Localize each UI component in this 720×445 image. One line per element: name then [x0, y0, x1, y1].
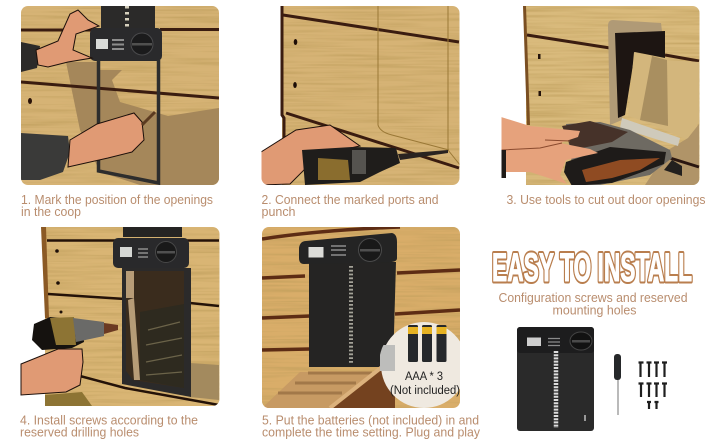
- hand: [261, 125, 360, 185]
- door frame outline: [98, 60, 158, 183]
- lower sleeve: [21, 133, 70, 180]
- control screen: [96, 39, 108, 49]
- drill handle lower: [45, 392, 92, 406]
- caption 5 second line: complete the time setting. Plug and play: [262, 426, 481, 440]
- panel: step 2 punch: [261, 6, 460, 185]
- product screen: [527, 338, 541, 346]
- straw highlight: [146, 322, 182, 375]
- control dial: [156, 242, 176, 262]
- top strip: [123, 227, 182, 237]
- lower plank line: [670, 158, 699, 167]
- plank lines: [21, 30, 219, 98]
- wall post: [41, 227, 49, 318]
- control housing: [113, 238, 189, 268]
- inset grey door edge: [380, 345, 395, 371]
- caption 2: 2. Connect the marked ports and: [262, 193, 439, 207]
- ramp support: [330, 367, 395, 408]
- drill bit: [398, 150, 448, 160]
- cut opening edge: [608, 20, 665, 125]
- door body: [309, 262, 396, 367]
- flap shade: [640, 56, 668, 126]
- opening left wood: [126, 271, 140, 380]
- control labels: [331, 246, 346, 255]
- bracket: [664, 160, 682, 176]
- lower hand: [68, 113, 144, 167]
- battery 1: [408, 325, 418, 362]
- control dial: [358, 238, 382, 262]
- cut flap: [628, 52, 699, 140]
- control screen: [308, 247, 324, 258]
- lower right shade: [190, 363, 219, 400]
- hand: [21, 349, 83, 395]
- caption 4 second line: reserved drilling holes: [20, 426, 139, 440]
- plank lines: [262, 227, 460, 350]
- drill gold: [50, 317, 76, 345]
- wall post: [523, 6, 530, 125]
- screwdriver: [614, 354, 621, 415]
- panel: step 5 batteries: [262, 227, 467, 408]
- white gap: [261, 6, 281, 153]
- product vent strip: [554, 351, 558, 428]
- wall holes: [55, 249, 62, 314]
- drill gold parts: [318, 158, 350, 180]
- panel: step 1 mark the position: [21, 6, 219, 185]
- wood wall: [526, 6, 700, 185]
- drill rear: [32, 317, 84, 350]
- upper hand: [36, 10, 99, 67]
- caption 5: 5. Put the batteries (not included) in and: [262, 414, 479, 428]
- door top strip: [101, 6, 155, 29]
- wall hole: [28, 98, 32, 104]
- battery inset circle: [381, 322, 467, 408]
- control labels: [112, 40, 124, 49]
- wood wall: [45, 227, 220, 406]
- panel: step 3 cut opening: [501, 6, 700, 186]
- door shadow on wall: [66, 62, 219, 185]
- caption 4: 4. Install screws according to the: [20, 414, 198, 428]
- control housing: [299, 233, 397, 264]
- ramp side rail: [330, 367, 382, 408]
- dark lower wood: [645, 124, 699, 185]
- screws: [638, 362, 667, 409]
- caption 1 second line: in the coop: [21, 205, 81, 219]
- control screen: [120, 247, 132, 257]
- upper sleeve: [21, 42, 40, 72]
- plank lines: [47, 240, 219, 405]
- finger lines: [501, 140, 570, 150]
- caption 3: 3. Use tools to cut out door openings: [506, 193, 706, 207]
- product: door unit: [517, 327, 594, 431]
- battery label: AAA * 3: [405, 371, 443, 383]
- plank lines: [527, 35, 699, 61]
- panel: step 4 install screws: [20, 227, 220, 406]
- product dial: [570, 332, 592, 350]
- product control panel: [517, 327, 594, 353]
- door frame: [122, 268, 191, 397]
- subtitle line 1: Configuration screws and reserved: [498, 291, 688, 305]
- ramp: [262, 372, 380, 408]
- wall holes: [538, 54, 541, 96]
- tool handle stripe: [582, 158, 660, 182]
- blade guard: [620, 118, 680, 146]
- battery 2: [422, 325, 432, 362]
- interior: [126, 271, 184, 388]
- ramp slats: [278, 373, 372, 393]
- subtitle line 2: mounting holes: [552, 304, 636, 318]
- drill chuck: [352, 150, 366, 174]
- plank lines: [282, 6, 460, 168]
- dark opening: [615, 31, 665, 118]
- control dial: [131, 33, 153, 55]
- battery note: (Not included): [390, 385, 460, 397]
- caption 1: 1. Mark the position of the openings: [21, 193, 213, 207]
- product labels: [548, 338, 560, 346]
- drill body: [302, 147, 400, 185]
- caption 2 second line: punch: [262, 205, 296, 219]
- door vent strip: [349, 266, 353, 364]
- product lock: [584, 415, 586, 421]
- sleeve: [501, 150, 506, 178]
- drill motor: [73, 318, 104, 342]
- tool upper grip: [562, 121, 628, 150]
- tool handle: [564, 147, 666, 186]
- wood wall: [282, 6, 460, 185]
- straw nest: [140, 304, 184, 388]
- pencil: [142, 112, 155, 125]
- hands: [501, 117, 598, 184]
- battery 3: [436, 325, 446, 362]
- tool head: [566, 122, 672, 185]
- control labels: [138, 249, 148, 257]
- door control housing: [90, 28, 162, 61]
- wall holes: [293, 39, 297, 88]
- strip vents: [125, 6, 129, 28]
- drill chuck: [104, 323, 118, 334]
